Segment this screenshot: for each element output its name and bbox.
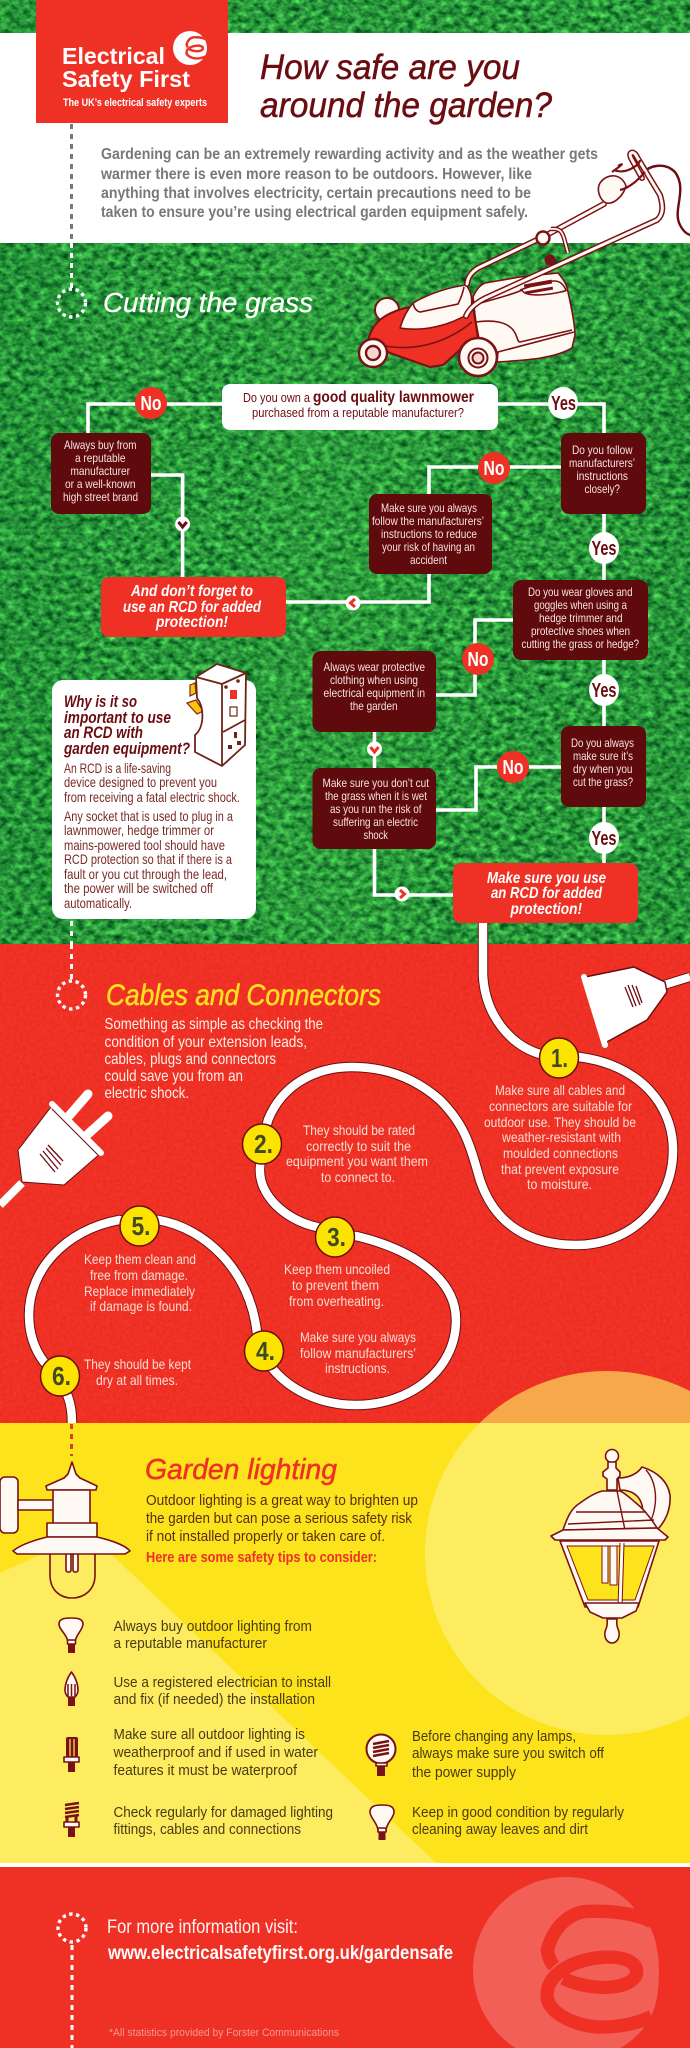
step 6: [40, 1356, 191, 1396]
step 1: outdoor use. They should be: [484, 1114, 636, 1130]
dotted timeline: grass to cables: [70, 921, 73, 980]
step 5: Keep them clean and: [84, 1251, 196, 1267]
step 4: instructions.: [325, 1360, 390, 1376]
box: follow manufacturers advice: Make sure you always: [381, 501, 477, 515]
box: don't cut wet grass: [312, 768, 436, 849]
dotted timeline: header: [70, 124, 73, 288]
heading: why RCD: important to use: [64, 708, 171, 727]
step 6: dry at all times.: [96, 1372, 178, 1388]
dotted timeline: cables heading: [70, 944, 73, 980]
box: gloves and goggles: Do you wear gloves and: [528, 585, 632, 599]
logo panel: Safety First: [62, 66, 190, 92]
text: lighting intro: Here are some safety tips to consider:: [146, 1549, 377, 1566]
step 2: They should be rated: [303, 1122, 415, 1138]
box: don't cut wet grass: shock: [364, 828, 389, 842]
box: don't cut wet grass: the grass when it is wet: [325, 789, 428, 803]
arrow badge: down: [175, 516, 190, 532]
icon: wall lamp: [0, 1462, 130, 1598]
dotted circle: cables: [58, 981, 86, 1009]
box: don't cut wet grass: as you run the risk of: [330, 802, 422, 816]
step 5: [84, 1206, 196, 1314]
text: RCD description: the power will be switched off: [64, 880, 213, 896]
cable path: [29, 923, 673, 1423]
icon: tube bulb: [64, 1737, 79, 1772]
box: don't cut wet grass: Make sure you don’t cut: [322, 776, 430, 790]
step 5: 5.: [132, 1211, 150, 1241]
text: lighting intro: [146, 1492, 418, 1566]
logo panel: [36, 0, 228, 123]
box: always buy: [51, 433, 151, 514]
step 2: equipment you want them: [286, 1153, 428, 1169]
box: dry when cutting: dry when you: [573, 762, 632, 776]
badge: no: No: [468, 649, 488, 671]
badge: yes: Yes: [551, 393, 576, 415]
box: gloves and goggles: goggles when using a: [534, 598, 627, 612]
heading: why RCD: [63, 692, 190, 758]
icon: globe bulb: [366, 1734, 396, 1776]
box: protective clothing: the garden: [350, 699, 398, 713]
badge: yes: [589, 674, 619, 706]
step 3: [284, 1217, 390, 1309]
text: cables intro: cables, plugs and connectors: [104, 1051, 276, 1068]
logo panel: The UK’s electrical safety experts: [63, 97, 207, 109]
callout: make sure you use an RCD: protection!: [510, 901, 583, 918]
step 1: moulded connections: [503, 1145, 618, 1161]
step 4: Make sure you always: [300, 1329, 416, 1345]
tip 5: the power supply: [412, 1764, 516, 1781]
step 1: connectors are suitable for: [489, 1098, 632, 1114]
tip 3: Make sure all outdoor lighting is: [114, 1726, 305, 1743]
tip 1: [59, 1618, 312, 1653]
badge: no: No: [140, 393, 162, 415]
callout: and don't forget: And don’t forget to: [130, 583, 253, 600]
icon: plug socket end: [584, 967, 690, 1045]
text: RCD description: An RCD is a life-saving: [64, 760, 171, 776]
badge: no: [135, 387, 167, 419]
red cables section background: [0, 944, 690, 1423]
icon: spiral bulb: [64, 1803, 79, 1837]
step 1: to moisture.: [527, 1176, 592, 1192]
text: lighting intro: Outdoor lighting is a great way to brighten up: [146, 1492, 418, 1509]
tip 6: cleaning away leaves and dirt: [412, 1821, 589, 1838]
panel: why use an RCD: [52, 664, 256, 919]
intro text: [100, 146, 598, 221]
box: dry when cutting: Do you always: [571, 736, 634, 750]
heading: cables and connectors: Cables and Connectors: [106, 979, 381, 1012]
text: lighting intro: if not installed properly or taken care of.: [146, 1528, 385, 1545]
tip 1: a reputable manufacturer: [114, 1635, 267, 1652]
text: cables intro: could save you from an: [104, 1068, 243, 1085]
arrow badge: down: [367, 742, 382, 756]
title: around the garden?: [260, 86, 552, 125]
badge: yes: Yes: [592, 828, 616, 850]
watermark logo: [473, 1877, 659, 2048]
grass background: [0, 0, 690, 945]
step 5: if damage is found.: [90, 1298, 192, 1314]
tip 2: [65, 1672, 331, 1708]
question: good quality lawnmower: Do you own a: [243, 391, 310, 405]
box: follow instructions: Do you follow: [572, 443, 633, 457]
logo mark: [173, 31, 207, 65]
badge: no: No: [502, 757, 524, 779]
callout: make sure you use an RCD: an RCD for added: [491, 885, 603, 902]
badge: no: No: [484, 458, 504, 480]
tip 5: [366, 1728, 605, 1781]
box: protective clothing: [312, 651, 436, 732]
heading: garden lighting: Garden lighting: [145, 1454, 337, 1486]
tip 5: always make sure you switch off: [412, 1745, 605, 1762]
icon: lawnmower: [359, 153, 690, 376]
tip 1: Always buy outdoor lighting from: [114, 1618, 312, 1635]
arrow badge: right: [394, 886, 410, 902]
step 4: 4.: [256, 1336, 275, 1366]
heading: why RCD: Why is it so: [64, 692, 137, 711]
box: don't cut wet grass: suffering an electric: [333, 815, 418, 829]
tip 3: weatherproof and if used in water: [113, 1744, 318, 1761]
step 3: 3.: [327, 1222, 346, 1252]
step 3: from overheating.: [289, 1293, 384, 1309]
yellow lighting section background: [0, 1423, 690, 1863]
box: follow manufacturers advice: your risk of having an: [382, 540, 475, 554]
intro text: warmer there is even more reason to be outdoors. However, like: [100, 166, 532, 183]
step 3: to prevent them: [292, 1277, 379, 1293]
step 1: weather-resistant with: [501, 1129, 621, 1145]
text: RCD description: device designed to prevent you: [64, 774, 217, 790]
title: How safe are you: [260, 48, 520, 87]
text: RCD description: automatically.: [64, 895, 132, 911]
icon: RCD socket: [187, 664, 246, 766]
icon: plug: [0, 1094, 108, 1205]
text: footnote: *All statistics provided by Forster Communications: [109, 2027, 339, 2039]
box: follow manufacturers advice: [369, 494, 492, 574]
badge: yes: Yes: [592, 538, 616, 560]
intro text: Gardening can be an extremely rewarding activity and as the weather gets: [101, 146, 598, 163]
tip 5: Before changing any lamps,: [412, 1728, 576, 1745]
box: follow manufacturers advice: instructions to reduce: [381, 527, 477, 541]
tip 6: Keep in good condition by regularly: [412, 1804, 624, 1821]
callout: and don't forget: [101, 577, 286, 637]
intro text: taken to ensure you’re using electrical garden equipment safely.: [101, 204, 528, 221]
box: always buy: or a well-known: [65, 477, 136, 491]
tip 6: [370, 1804, 624, 1840]
question: good quality lawnmower: purchased from a reputable manufacturer?: [252, 406, 464, 420]
box: protective clothing: Always wear protective: [324, 660, 425, 674]
logo panel: Electrical: [62, 43, 165, 69]
light beam and glow: [0, 1371, 690, 1863]
tip 4: fittings, cables and connections: [114, 1821, 301, 1838]
badge: yes: Yes: [592, 680, 616, 702]
box: follow instructions: [561, 433, 646, 514]
text: RCD description: from receiving a fatal electric shock.: [64, 789, 240, 805]
footer divider: [0, 1863, 690, 1867]
step 2: 2.: [254, 1129, 273, 1159]
icon: candle bulb: [65, 1672, 78, 1706]
step 1: [484, 1038, 636, 1192]
step 6: 6.: [52, 1361, 71, 1391]
box: follow manufacturers advice: follow the manufacturers’: [372, 514, 484, 528]
box: protective clothing: clothing when using: [330, 673, 418, 687]
header band: [0, 33, 690, 243]
box: gloves and goggles: protective shoes when: [531, 624, 630, 638]
box: protective clothing: electrical equipment in: [324, 686, 425, 700]
badge: no: [478, 452, 510, 484]
text: cables intro: condition of your extension leads,: [104, 1034, 307, 1051]
step 1: Make sure all cables and: [495, 1082, 625, 1098]
box: follow instructions: manufacturers’: [569, 456, 635, 470]
step 5: free from damage.: [90, 1267, 188, 1283]
step 4: follow manufacturers’: [300, 1345, 416, 1361]
badge: no: [462, 643, 494, 675]
title: [260, 48, 552, 125]
tip 2: Use a registered electrician to install: [114, 1674, 331, 1691]
footer panel: [0, 1867, 690, 2048]
question: good quality lawnmower: [222, 384, 498, 430]
icon: reflector bulb: [370, 1805, 394, 1840]
dotted circle: cutting the grass: [58, 289, 86, 317]
callout: and don't forget: use an RCD for added: [123, 599, 262, 616]
box: dry when cutting: cut the grass?: [573, 775, 633, 789]
text: RCD description: [64, 760, 240, 911]
tip 4: [64, 1803, 333, 1838]
text: RCD description: mains-powered tool should have: [64, 837, 225, 853]
box: always buy: high street brand: [63, 490, 138, 504]
box: follow instructions: closely?: [584, 482, 620, 496]
text: url: www.electricalsafetyfirst.org.uk/gardensafe: [107, 1943, 453, 1964]
arrow badge: left: [346, 596, 360, 610]
box: always buy: a reputable: [75, 451, 126, 465]
heading: why RCD: an RCD with: [64, 723, 143, 742]
badge: yes: [589, 532, 619, 564]
step 2: [242, 1122, 428, 1185]
text: cables intro: Something as simple as checking the: [104, 1016, 323, 1033]
dotted timeline: lighting: [70, 1424, 73, 1456]
box: gloves and goggles: hedge trimmer and: [539, 611, 622, 625]
heading: cutting the grass: Cutting the grass: [103, 287, 313, 318]
text: cables intro: [104, 1016, 323, 1102]
heading: why RCD: garden equipment?: [63, 739, 190, 758]
badge: yes: [548, 387, 578, 419]
step 6: They should be kept: [84, 1356, 191, 1372]
intro text: anything that involves electricity, certain precautions need to be: [101, 185, 531, 202]
badge: no: [497, 751, 529, 783]
tip 4: Check regularly for damaged lighting: [114, 1804, 333, 1821]
step 2: correctly to suit the: [306, 1138, 411, 1154]
box: gloves and goggles: cutting the grass or hedge?: [522, 637, 639, 651]
box: follow instructions: instructions: [576, 469, 628, 483]
text: more information: For more information visit:: [107, 1917, 298, 1938]
icon: lantern: [551, 1450, 670, 1643]
text: RCD description: RCD protection so that if there is a: [64, 851, 232, 867]
tip 3: features it must be waterproof: [114, 1762, 298, 1779]
box: always buy: Always buy from: [64, 438, 136, 452]
callout: make sure you use an RCD: Make sure you use: [487, 870, 606, 887]
text: cables intro: electric shock.: [104, 1085, 189, 1102]
text: RCD description: Any socket that is used to plug in a: [64, 808, 233, 824]
question: good quality lawnmower: good quality lawnmower: [313, 389, 474, 406]
text: lighting intro: the garden but can pose a serious safety risk: [146, 1510, 412, 1527]
dotted timeline: footer: [70, 1945, 74, 2048]
box: dry when cutting: [561, 726, 646, 807]
step 2: to connect to.: [321, 1169, 395, 1185]
callout: make sure you use an RCD: [453, 863, 638, 923]
step 1: 1.: [551, 1043, 568, 1073]
icon: reflector bulb: [59, 1618, 83, 1653]
step 3: Keep them uncoiled: [284, 1261, 390, 1277]
orange glow circle: [425, 1371, 690, 1735]
box: always buy: manufacturer: [70, 464, 130, 478]
tip 2: and fix (if needed) the installation: [114, 1691, 315, 1708]
box: dry when cutting: make sure it’s: [573, 749, 633, 763]
text: RCD description: fault or you cut through the lead,: [64, 866, 227, 882]
text: RCD description: lawnmower, hedge trimmer or: [64, 822, 214, 838]
badge: yes: [589, 822, 619, 854]
callout: and don't forget: protection!: [155, 614, 229, 631]
box: gloves and goggles: [513, 580, 648, 660]
step 1: that prevent exposure: [501, 1161, 619, 1177]
step 5: Replace immediately: [84, 1283, 195, 1299]
tip 3: [64, 1726, 318, 1779]
box: follow manufacturers advice: accident: [410, 553, 448, 567]
flowchart connector lines: [88, 404, 604, 895]
step 4: [244, 1329, 416, 1376]
dotted circle: footer: [58, 1914, 86, 1942]
